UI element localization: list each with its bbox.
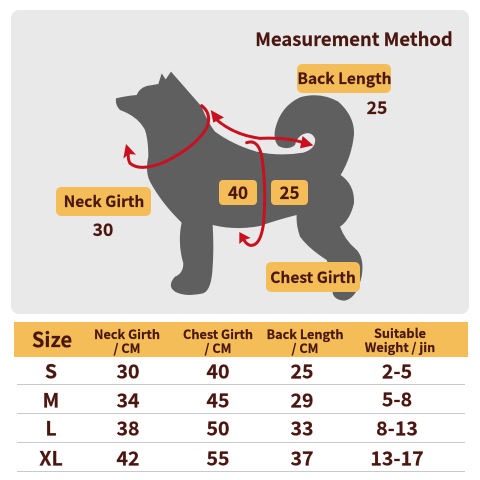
row L: 33	[290, 412, 314, 442]
label: chest girth	[266, 262, 360, 292]
row L: 8-13	[376, 412, 418, 442]
table header: Chest Girth	[183, 324, 253, 343]
row S: 40	[206, 356, 230, 384]
row XL: XL	[39, 442, 63, 472]
dog silhouette	[116, 72, 362, 301]
title: Measurement Method	[255, 26, 453, 52]
table header: / CM	[205, 338, 231, 357]
row S: 25	[290, 356, 314, 384]
table header: Back Length	[266, 324, 344, 343]
table header: / CM	[114, 338, 140, 357]
row M: 5-8	[382, 384, 412, 412]
row L: L	[45, 412, 57, 442]
row XL	[39, 442, 424, 472]
row S: 2-5	[382, 356, 412, 384]
row M: 34	[116, 384, 140, 414]
table grid lines	[17, 384, 465, 472]
table header	[14, 322, 468, 357]
value: back length: 25	[367, 95, 387, 120]
label: chest girth: Chest Girth	[270, 266, 356, 288]
arrow: back length	[211, 110, 313, 148]
panel: measurement method	[11, 10, 469, 314]
row XL: 37	[290, 442, 314, 472]
arrow: chest girth	[239, 142, 265, 245]
table header: / CM	[292, 338, 318, 357]
row S: S	[45, 356, 57, 384]
row XL: 13-17	[370, 442, 424, 472]
value: back 25	[271, 179, 308, 205]
row M: M	[43, 384, 59, 414]
arrow: neck girth	[123, 106, 209, 167]
row M: 29	[290, 384, 314, 414]
value: chest 40: 40	[228, 179, 248, 204]
value: neck girth: 30	[93, 217, 113, 242]
row M	[43, 384, 412, 414]
row L	[45, 412, 418, 442]
table header: Size	[32, 324, 72, 353]
size table	[14, 322, 468, 472]
row XL: 42	[116, 442, 140, 472]
value: back 25: 25	[279, 179, 300, 204]
value: chest 40	[219, 179, 257, 205]
row L: 50	[206, 412, 230, 442]
row L: 38	[116, 412, 140, 442]
label: neck girth	[56, 187, 151, 216]
label: neck girth: Neck Girth	[64, 190, 144, 212]
row S: 30	[116, 356, 140, 384]
label: back length: Back Length	[297, 67, 392, 89]
table header: Weight / jin	[365, 337, 435, 356]
row S	[45, 356, 412, 384]
table header: Neck Girth	[94, 324, 160, 343]
table header: Suitable	[374, 323, 426, 342]
row M: 45	[206, 384, 230, 414]
row XL: 55	[206, 442, 230, 472]
